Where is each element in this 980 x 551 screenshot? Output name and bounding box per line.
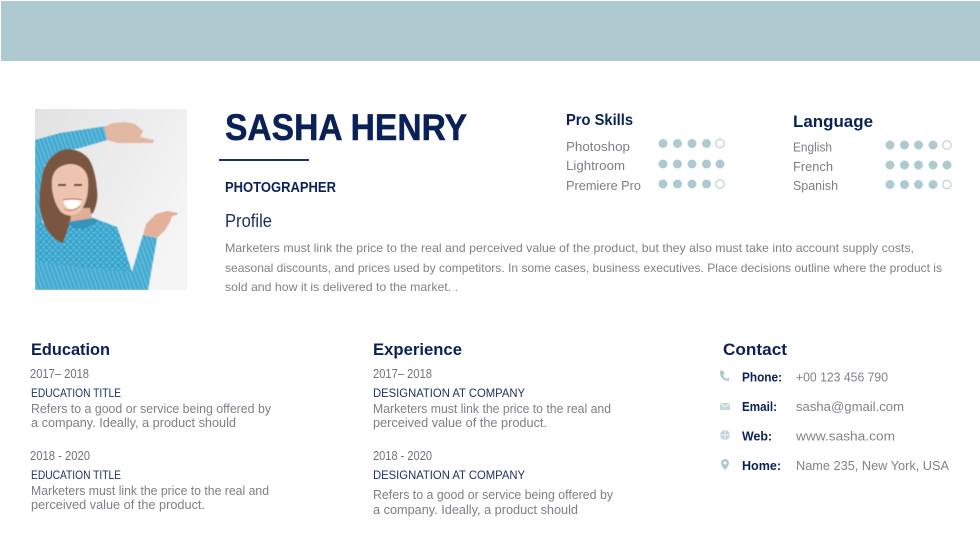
experience entry 1: DESIGNATION AT COMPANY xyxy=(373,388,525,400)
name underline xyxy=(219,159,309,161)
icon: email xyxy=(720,403,730,410)
phone row: Phone: xyxy=(742,370,782,384)
language labels: French xyxy=(793,159,833,174)
contact heading: Contact xyxy=(723,340,787,359)
home row: Home: xyxy=(742,459,781,473)
web row: www.sasha.com xyxy=(795,428,895,444)
panel: education xyxy=(30,340,271,512)
profile section xyxy=(225,211,942,294)
photo: woman in blue sweater xyxy=(35,109,187,290)
education entry 1: EDUCATION TITLE xyxy=(31,388,121,400)
web row: Web: xyxy=(742,430,772,444)
icon: phone xyxy=(720,370,729,381)
email row: sasha@gmail.com xyxy=(796,399,904,414)
skill labels: Lightroom xyxy=(566,158,625,173)
experience entry 1: perceived value of the product. xyxy=(373,415,547,430)
profile text xyxy=(225,241,942,294)
education entry 2: perceived value of the product. xyxy=(31,497,205,512)
education entry 2 xyxy=(30,449,269,512)
experience entry 1: Marketers must link the price to the real and xyxy=(373,401,611,416)
language heading: Language xyxy=(793,112,873,131)
email row: Email: xyxy=(742,400,777,414)
language rating dots xyxy=(886,140,952,189)
experience entry 2: Refers to a good or service being offered by xyxy=(373,487,613,502)
experience entry 2: DESIGNATION AT COMPANY xyxy=(373,470,525,482)
education entry 2: EDUCATION TITLE xyxy=(31,470,121,482)
education entry 1: a company. Ideally, a product should xyxy=(31,415,236,430)
email row xyxy=(742,399,904,414)
pro skills heading: Pro Skills xyxy=(566,112,633,129)
education entry 1: Refers to a good or service being offered by xyxy=(31,401,271,416)
skill labels: Photoshop xyxy=(566,139,630,154)
experience entry 1 xyxy=(373,367,611,430)
panel: pro skills xyxy=(566,112,724,193)
experience entry 1: 2017– 2018 xyxy=(373,367,432,381)
profile text: sold and how it is delivered to the market. . xyxy=(225,280,458,294)
name: SASHA HENRY xyxy=(225,107,467,148)
skill rating dots xyxy=(658,139,724,188)
profile heading: Profile xyxy=(225,211,272,231)
skill labels: Premiere Pro xyxy=(566,178,641,193)
experience entry 2: a company. Ideally, a product should xyxy=(373,502,578,517)
education entry 2: Marketers must link the price to the real and xyxy=(31,483,269,498)
education entry 2: 2018 - 2020 xyxy=(30,449,90,463)
education entry 1: 2017– 2018 xyxy=(30,367,89,381)
top banner xyxy=(1,1,980,61)
panel: experience xyxy=(373,340,613,517)
experience entry 2: 2018 - 2020 xyxy=(373,449,432,463)
phone row xyxy=(742,370,888,384)
language labels: Spanish xyxy=(793,178,838,193)
experience heading: Experience xyxy=(373,340,462,359)
language labels xyxy=(793,140,838,193)
education heading: Education xyxy=(31,340,110,359)
skill labels xyxy=(566,139,641,193)
icon: globe xyxy=(720,430,730,440)
icon: map pin xyxy=(721,459,729,470)
home row: Name 235, New York, USA xyxy=(796,458,949,473)
experience entry 2 xyxy=(373,449,613,517)
panel: contact xyxy=(720,340,949,473)
language labels: English xyxy=(793,140,832,154)
job title: PHOTOGRAPHER xyxy=(225,180,336,196)
education entry 1 xyxy=(30,367,271,430)
phone row: +00 123 456 790 xyxy=(796,370,888,384)
panel: language xyxy=(793,112,952,193)
profile text: seasonal discounts, and prices used by competitors. In some cases, business executives. Place decisions outline where the product is xyxy=(225,261,942,275)
profile text: Marketers must link the price to the real and perceived value of the product, but they also must take into account supply costs, xyxy=(225,241,914,255)
web row xyxy=(742,428,895,444)
